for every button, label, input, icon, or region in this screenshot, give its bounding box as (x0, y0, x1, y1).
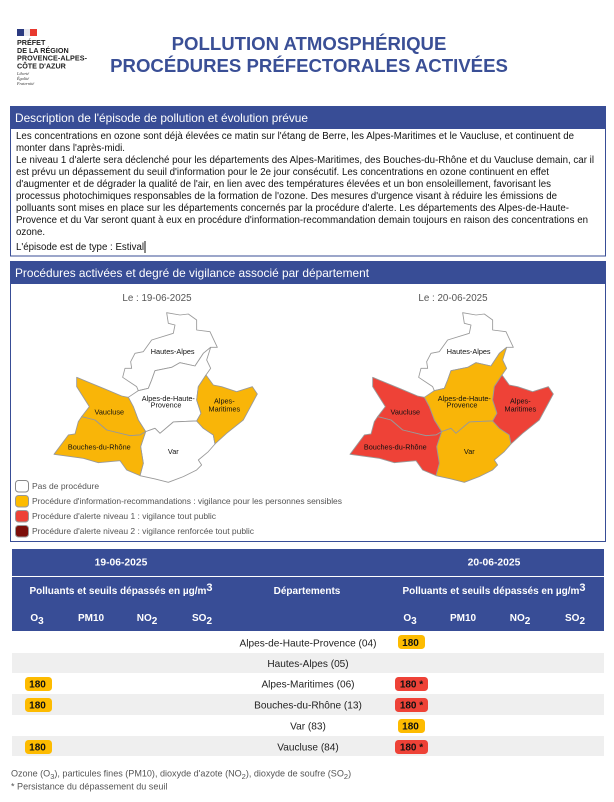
map: 20-06-2025: Alpes-de-Haute- (438, 394, 491, 403)
text block: description: ozone. (16, 227, 45, 238)
table header: SO (192, 613, 206, 624)
logo: Préfet de la région (16, 29, 88, 86)
table rows (12, 635, 604, 756)
table header: 3 (579, 582, 586, 594)
pills: 20-06-2025: 180 * (400, 742, 423, 754)
footnotes: ), dioxyde de soufre (SO (246, 768, 344, 778)
table header: Polluants et seuils dépassés en µg/m (29, 586, 206, 597)
panel: description (10, 106, 606, 256)
table header: 3 (38, 616, 44, 627)
logo: Préfet de la région: Égalité (16, 76, 30, 81)
footnotes: ) (348, 768, 351, 778)
table header: 2 (206, 616, 212, 627)
table header: O (403, 613, 411, 624)
table rows: Alpes-de-Haute-Provence (04) (240, 638, 376, 650)
footnotes: ), particules fines (PM10), dioxyde d'azote (NO (54, 768, 242, 778)
table header: PM10 (450, 613, 476, 624)
text block: description: L'épisode est de type : Estival (16, 242, 144, 253)
logo: Préfet de la région: Fraternité (16, 81, 35, 86)
logo: Préfet de la région: CÔTE D'AZUR (17, 62, 67, 70)
footnotes (11, 768, 351, 792)
text block: description: d'augmenter et de dégrader la qualité de l'air, en lien avec des températures élevées et un bon ensoleillement, favorisant les (16, 179, 551, 190)
table header: 2 (579, 616, 585, 627)
map: 20-06-2025: Vaucluse (391, 407, 420, 416)
title: POLLUTION ATMOSPHÉRIQUE (172, 33, 446, 54)
logo: Préfet de la région: PRÉFET (17, 38, 46, 47)
map: 19-06-2025 (54, 293, 257, 482)
heading: description (10, 106, 606, 129)
map: 19-06-2025: Var (168, 447, 179, 456)
text block: description: polluants sont mises en place sur les départements concernés par la procédure d'alerte. Les départements des Alpes-de-Haute- (16, 203, 569, 214)
heading: description: Description de l'épisode de pollution et évolution prévue (15, 111, 308, 125)
map: 19-06-2025: Alpes- (214, 397, 235, 406)
footnotes: 3 (50, 772, 54, 781)
table header: SO (565, 613, 579, 624)
logo: Préfet de la région: PROVENCE-ALPES- (17, 54, 88, 62)
table rows: Bouches-du-Rhône (13) (254, 700, 362, 712)
table rows: Vaucluse (84) (277, 742, 339, 754)
table rows: Alpes-Maritimes (06) (261, 680, 355, 690)
pills: 19-06-2025: 180 (29, 742, 46, 754)
table header: NO (137, 613, 152, 624)
pills: 20-06-2025: 180 (402, 638, 419, 649)
footnotes: 2 (242, 772, 246, 781)
pills: 20-06-2025: 180 (402, 722, 419, 732)
map: 20-06-2025 (350, 293, 553, 482)
map: 20-06-2025: Bouches-du-Rhône (364, 442, 427, 451)
map: 19-06-2025: Hautes-Alpes (151, 347, 195, 356)
logo: Préfet de la région: DE LA RÉGION (17, 46, 69, 55)
text block: description: Le niveau 1 d'alerte sera déclenché pour les départements des Alpes-Maritimes, des Bouches-du-Rhône et du Vaucluse demain, car il (16, 155, 594, 166)
title: PROCÉDURES PRÉFECTORALES ACTIVÉES (110, 55, 508, 76)
table header: PM10 (78, 613, 104, 624)
heading: procedures (10, 261, 606, 284)
table header: 20-06-2025 (468, 558, 521, 568)
map: 19-06-2025: Vaucluse (95, 407, 124, 416)
footnotes: Ozone (O (11, 768, 50, 778)
table: pollutants by department (12, 549, 604, 756)
title (110, 33, 508, 76)
legend: Procédure d'information-recommandations : vigilance pour les personnes sensibles (32, 496, 342, 506)
table rows: Hautes-Alpes (05) (267, 659, 349, 670)
panel: procedures (10, 261, 606, 542)
text block: description: processus photochimiques responsables de la formation de l'ozone. Des mesures d'urgence visant à réduire les émissions de (16, 191, 557, 202)
text block: description (16, 131, 594, 253)
pills: 19-06-2025 (25, 677, 52, 754)
table header: Polluants et seuils dépassés en µg/m (402, 586, 579, 597)
table header (12, 549, 604, 631)
map: 19-06-2025: Bouches-du-Rhône (68, 442, 131, 451)
pills: 20-06-2025: 180 * (400, 700, 423, 712)
pills: 19-06-2025: 180 (29, 700, 46, 712)
map: 20-06-2025: Var (464, 447, 475, 456)
text block: description: Les concentrations en ozone sont déjà élevées ce matin sur l'étang de Berre, les Alpes-Maritimes et le Vaucluse, et continuent de (16, 131, 574, 142)
map: 20-06-2025: Hautes-Alpes (447, 347, 491, 356)
table header: Départements (274, 586, 341, 597)
logo: Préfet de la région: Liberté (16, 71, 30, 76)
map: 19-06-2025: Alpes-de-Haute- (142, 394, 195, 403)
table header: 3 (411, 616, 417, 627)
text block: description: Provence et du Var seront quant à eux en procédure d'information-recommandation demain toujours en raison des concentrations en (16, 215, 588, 226)
table header: 3 (206, 582, 213, 594)
table header: 2 (152, 616, 158, 627)
map: 20-06-2025: Le : 20-06-2025 (418, 293, 488, 304)
map: 19-06-2025: Maritimes (208, 404, 240, 413)
legend: Procédure d'alerte niveau 1 : vigilance tout public (32, 511, 217, 521)
table header: 2 (525, 616, 531, 627)
pills: 20-06-2025 (395, 635, 428, 754)
heading: procedures: Procédures activées et degré de vigilance associé par département (15, 266, 370, 280)
footnotes: * Persistance du dépassement du seuil (11, 782, 167, 792)
table header: O (30, 613, 38, 624)
pills: 20-06-2025: 180 * (400, 680, 423, 690)
table rows: Var (83) (290, 722, 326, 732)
footnotes: 2 (344, 772, 348, 781)
legend (16, 480, 342, 537)
legend: Pas de procédure (32, 481, 99, 491)
map: 20-06-2025: Alpes- (510, 397, 531, 406)
map: 20-06-2025: Maritimes (504, 404, 536, 413)
text block: description: monter dans l'après-midi. (16, 143, 125, 154)
table header: 19-06-2025 (95, 558, 148, 568)
map: 19-06-2025: Le : 19-06-2025 (122, 293, 192, 304)
text block: description: est prévu un dépassement du seuil d'information pour le 2e jour consécutif. Les concentrations en ozone continuent en effet (16, 167, 549, 178)
map: 19-06-2025: Provence (151, 400, 181, 409)
map: 20-06-2025: Provence (447, 400, 477, 409)
table header: NO (510, 613, 525, 624)
pills: 19-06-2025: 180 (29, 680, 46, 690)
legend: Procédure d'alerte niveau 2 : vigilance renforcée tout public (32, 526, 255, 536)
